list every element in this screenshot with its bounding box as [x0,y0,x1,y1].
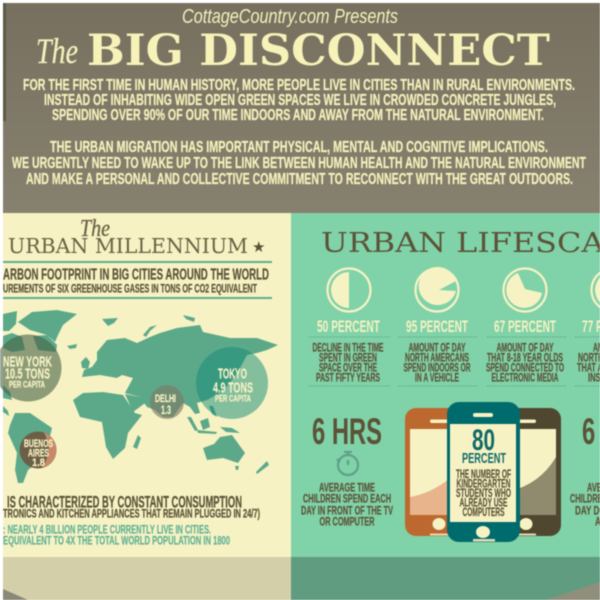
population text: EQUIVALENT TO 4X THE TOTAL WORLD POPULATION IN 1800 [3,534,230,548]
icon: stopwatch [337,452,358,475]
bubble: new york: NEW YORK [3,354,52,370]
heading: the urban millennium: ★ [252,238,265,256]
panel: urban millennium [0,213,291,600]
stat: 67 percent: AMOUNT OF DAY [496,340,554,354]
stat: 95 percent: SPEND INDOORS OR [404,360,471,374]
bubble: buenos aires: BUENOS [24,438,53,450]
presenter line: CottageCountry.com Presents [182,6,398,28]
intro text [12,77,586,188]
stat: 50 percent: 50 PERCENT [317,317,380,336]
heading: the urban millennium: URBAN MILLENNIUM [8,234,248,258]
consumption text [3,494,260,520]
phone: teal with 80 percent [447,402,520,542]
stat: 6 hrs tv: DAY IN FRONT OF THE TV [301,504,393,518]
footer band left [3,557,291,600]
stat: 95 percent: IN A VEHICLE [415,370,459,384]
stat: 67 percent: 67 PERCENT [494,317,556,336]
bubble: delhi: 1.3 [161,403,171,417]
phone: teal with 80 percent: STUDENTS WHO [456,486,511,500]
heading: urban lifescape: URBAN LIFESCAPE [321,227,600,259]
stat: 95 percent: 95 PERCENT [406,317,468,336]
phone: orange [405,408,465,536]
title: BIG DISCONNECT [87,26,550,76]
heading: the urban millennium: The [80,216,110,242]
footer band right [291,557,600,600]
panel: header [3,3,600,213]
bubble: buenos aires: 1.8 [32,457,45,469]
bubble: new york: PER CAPITA [9,380,45,390]
world map [3,310,278,483]
phone: teal with 80 percent: KINDERGARTEN [456,476,510,490]
phone: dark [505,408,561,536]
bubble: delhi [150,385,184,419]
stat: 50 percent: PAST FIFTY YEARS [316,370,380,384]
population text: : NEARLY 4 BILLION PEOPLE CURRENTLY LIVE IN CITIES. [3,522,211,536]
bubble: tokyo: TOKYO [218,366,247,382]
stat: 6 hrs tv: 6 HRS [312,411,382,452]
heading: the urban millennium [8,216,265,258]
phone: teal with 80 percent: 80 [472,424,495,457]
consumption text: TRONICS AND KITCHEN APPLIANCES THAT REMAIN PLUGGED IN 24/7) [3,506,260,520]
bubble: new york [0,334,62,402]
bubble: new york: 10.5 TONS [5,366,50,382]
bubble: tokyo: PER CAPITA [215,394,251,404]
stat: 6 hrs right [570,411,600,528]
stat: 67 percent [486,268,564,384]
stat: 6 hrs tv: CHILDREN SPEND EACH [303,492,391,506]
stat: 6 hrs tv [301,411,393,528]
panel: urban lifescape [291,213,600,600]
bubble: buenos aires [20,432,56,469]
bubble: buenos aires: AIRES [28,448,49,460]
stat: 95 percent [404,267,471,384]
stat: 6 hrs tv: AVERAGE TIME [319,480,375,494]
bubble: tokyo [196,347,268,419]
phone: teal with 80 percent: PERCENT [462,450,506,467]
stat: 50 percent: SPENT IN GREEN [319,350,377,364]
stat: 95 percent: NORTH AMERCANS [405,350,469,364]
phone: teal with 80 percent: ALREADY USE [460,496,508,510]
carbon footprint heading: UREMENTS OF SIX GREENHOUSE GASES IN TONS OF CO2 EQUIVALENT [3,282,257,296]
carbon footprint heading [3,266,269,296]
stat: 50 percent: DECLINE IN THE TIME [312,340,384,354]
title: The [36,31,78,71]
bubble: delhi: DELHI [155,393,176,405]
phone: teal with 80 percent: THE NUMBER OF [456,467,511,481]
stat: 50 percent [312,268,384,384]
stat: 6 hrs tv: OR COMPUTER [320,514,375,528]
stat: 77 percent [577,268,600,384]
bubble: tokyo: 4.9 TONS [213,380,253,396]
carbon footprint heading: ARBON FOOTPRINT IN BIG CITIES AROUND THE WORLD [3,266,269,284]
phone: teal with 80 percent: COMPUTERS [462,505,504,519]
population text [3,522,230,548]
stat: 50 percent: SPACE OVER THE [319,360,377,374]
consumption text: IS CHARACTERIZED BY CONSTANT CONSUMPTION [7,494,242,512]
stat: 95 percent: AMOUNT OF DAY [408,340,466,354]
